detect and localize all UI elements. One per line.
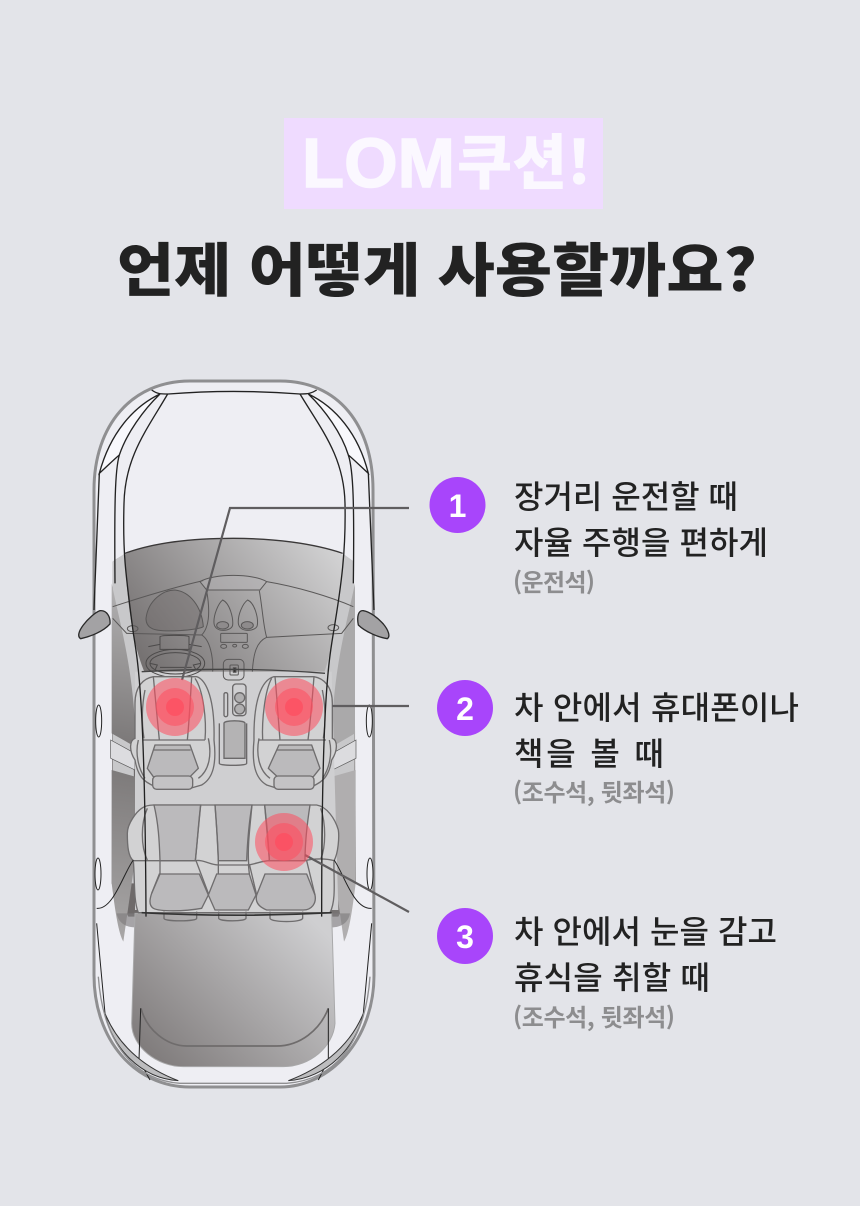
title badge: LOM쿠션!: LOM [302,124,455,202]
callout 3 text [513,907,777,1033]
number badge 2: 2 [456,691,474,727]
callout 2 [437,680,799,808]
hotspot: driver seat [146,678,204,736]
heading: 언제 어떻게 사용할까요? [117,224,757,308]
number badge 3: 3 [456,919,474,955]
car illustration [79,381,389,1087]
title badge: LOM쿠션! [284,115,603,209]
front seat left [131,677,215,789]
callout 3 [437,907,777,1033]
leader lines [182,508,409,912]
interior cabin [111,538,356,942]
hotspot: passenger seat [265,678,323,736]
center console [142,669,325,765]
callout 1 [430,472,768,598]
callout 2 text: (조수석, 뒷좌석) [513,773,675,808]
front seat right [253,677,336,789]
callout 1 text [513,472,768,598]
car body [94,381,374,1087]
number badge 1: 1 [449,488,466,524]
number badge 3 [437,908,493,964]
title badge: LOM쿠션!: 쿠션! [457,115,591,202]
callout 2 text: 책을 볼 때 [514,729,664,775]
callout 1 text: 자율 주행을 편하게 [514,518,768,564]
windows and pillars [94,390,374,1083]
side mirrors [79,611,389,639]
rear seats [127,805,339,922]
callout 3 text: (조수석, 뒷좌석) [513,998,675,1033]
callout 1 text: 장거리 운전할 때 [514,472,738,518]
callout 3 text: 휴식을 취할 때 [514,953,710,999]
number badge 1 [430,477,486,533]
callout 2 text: 차 안에서 휴대폰이나 [514,683,799,729]
dashboard [113,575,353,680]
steering wheel [146,635,205,677]
callout 3 text: 차 안에서 눈을 감고 [514,907,777,953]
hotspot: rear seat [255,813,313,871]
callout 1 text: (운전석) [513,563,595,598]
number badge 2 [437,680,493,736]
callout 2 text [513,683,799,808]
trunk [132,913,335,1067]
